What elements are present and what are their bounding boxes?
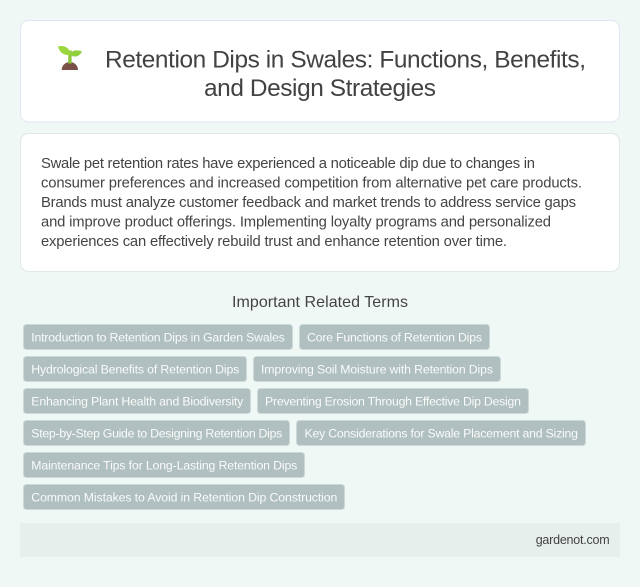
- tag: Maintenance Tips for Long-Lasting Retention Dips: [31, 459, 297, 473]
- summary paragraph: consumer preferences and increased competition from alternative pet care products.: [41, 176, 582, 192]
- tag: [24, 452, 304, 478]
- summary paragraph: experiences can effectively rebuild trust and enhance retention over time.: [41, 234, 507, 250]
- tag: [300, 324, 490, 350]
- tag: Hydrological Benefits of Retention Dips: [31, 363, 239, 377]
- tag: Preventing Erosion Through Effective Dip Design: [265, 395, 521, 409]
- summary paragraph: and improve product offerings. Implementing loyalty programs and personalized: [41, 214, 551, 230]
- tag: [24, 420, 290, 446]
- tag: Step-by-Step Guide to Designing Retention Dips: [31, 427, 282, 441]
- tag: [24, 324, 292, 350]
- panel: related term tags: [24, 324, 586, 510]
- tag: [254, 356, 500, 382]
- tag: [24, 356, 246, 382]
- panel: summary text card: [20, 134, 620, 272]
- footer site name: gardenot.com: [536, 533, 610, 547]
- tag: [24, 388, 250, 414]
- tag: Enhancing Plant Health and Biodiversity: [31, 395, 244, 409]
- title: and Design Strategies: [204, 75, 436, 102]
- summary paragraph: [41, 156, 582, 250]
- summary paragraph: Swale pet retention rates have experienced a noticeable dip due to changes in: [41, 156, 535, 172]
- tag: [296, 420, 586, 446]
- title: [105, 46, 586, 102]
- heading: important related terms: Important Related Terms: [232, 294, 408, 311]
- tag: [258, 388, 528, 414]
- footer bar: [20, 523, 620, 557]
- tag: Core Functions of Retention Dips: [307, 331, 482, 345]
- icon: sprout: [58, 46, 82, 70]
- title: Retention Dips in Swales: Functions, Benefits,: [105, 46, 586, 74]
- tag: Introduction to Retention Dips in Garden Swales: [31, 331, 285, 345]
- tag: Common Mistakes to Avoid in Retention Dip Construction: [31, 491, 337, 505]
- panel: title card: [20, 20, 620, 122]
- tag: Improving Soil Moisture with Retention Dips: [261, 363, 493, 377]
- summary paragraph: Brands must analyze customer feedback and market trends to address service gaps: [41, 195, 576, 211]
- tag: Key Considerations for Swale Placement and Sizing: [304, 427, 578, 441]
- tag: [24, 484, 344, 510]
